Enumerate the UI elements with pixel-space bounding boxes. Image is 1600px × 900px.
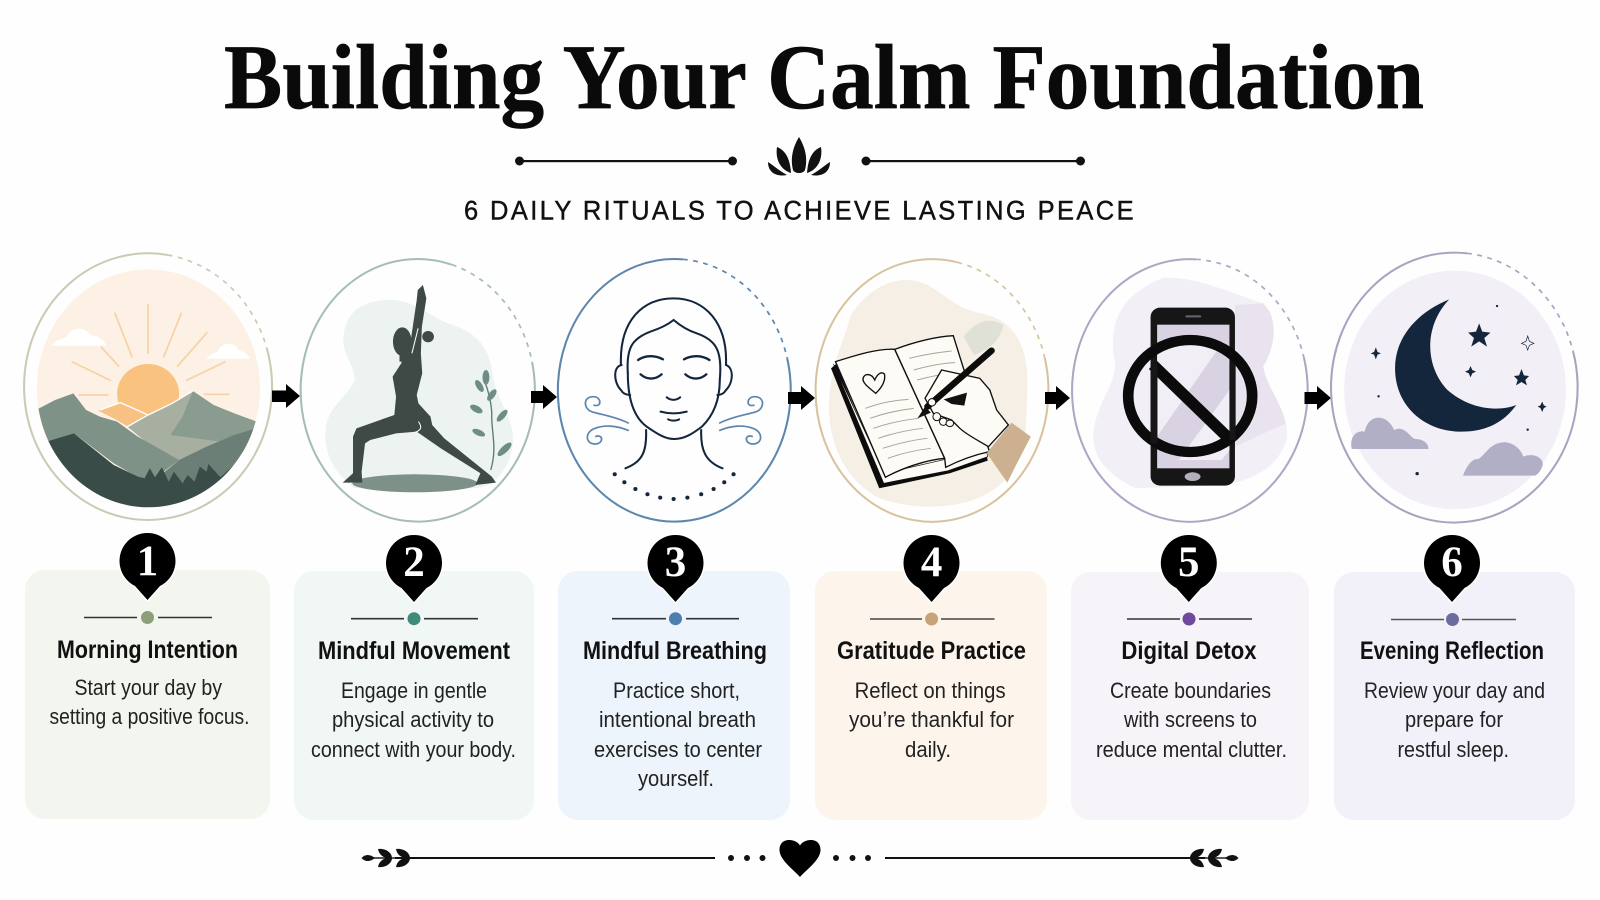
footer ornament: arrows, dots and heart: [362, 840, 1238, 877]
illustration 1: sunrise over mountains: [24, 253, 272, 520]
title: Building Your Calm Foundation: [224, 26, 1424, 128]
illustration 6: moon and stars: [1331, 253, 1578, 523]
heading: Digital Detox: [1121, 637, 1257, 665]
description: Engage in gentle: [341, 678, 487, 703]
description: with screens to: [1123, 707, 1257, 732]
description: Practice short,: [613, 678, 740, 703]
description: Create boundaries: [1110, 678, 1271, 703]
heading: Mindful Movement: [318, 637, 511, 665]
subtitle: 6 DAILY RITUALS TO ACHIEVE LASTING PEACE: [464, 196, 1136, 226]
description: intentional breath: [599, 707, 756, 732]
number pin 3: 3: [665, 539, 686, 586]
heading: Morning Intention: [57, 636, 238, 664]
heading: Gratitude Practice: [837, 637, 1026, 665]
number pin 4: [904, 535, 960, 602]
number pin 5: 5: [1178, 539, 1200, 586]
panel: step 4 card: [815, 535, 1047, 820]
number pin 6: 6: [1441, 539, 1463, 586]
panel: step 2 card: [294, 535, 534, 820]
panel: step 1 card: [25, 533, 270, 819]
illustration 2: yoga pose: [301, 259, 535, 522]
description: restful sleep.: [1398, 737, 1509, 762]
arrow 3: [788, 386, 815, 410]
number pin 1: 1: [137, 538, 158, 585]
arrow 5: [1304, 386, 1331, 410]
description: connect with your body.: [311, 737, 516, 762]
description: [849, 678, 1014, 762]
arrow 4: [1045, 386, 1070, 410]
number pin 5: [1161, 535, 1217, 602]
description: [311, 678, 516, 762]
description: [1364, 678, 1545, 762]
description: you’re thankful for: [849, 707, 1014, 732]
description: Review your day and: [1364, 678, 1545, 703]
arrow 1: [272, 384, 300, 408]
arrow 2: [531, 385, 557, 409]
description: daily.: [905, 737, 951, 762]
number pin 1: [120, 533, 176, 600]
ornament: lotus divider: [515, 137, 1085, 175]
illustration 3: breathing face: [558, 259, 791, 522]
description: [1096, 678, 1287, 762]
description: Reflect on things: [855, 678, 1006, 703]
description: exercises to center: [594, 737, 762, 762]
panel: step 6 card: [1334, 535, 1575, 820]
number pin 3: [648, 535, 704, 602]
description: Start your day by: [74, 675, 222, 700]
illustration 5: digital detox phone: [1072, 259, 1308, 522]
heading: Mindful Breathing: [583, 637, 767, 665]
heading: Evening Reflection: [1360, 637, 1544, 665]
description: [594, 678, 762, 791]
description: physical activity to: [332, 707, 494, 732]
description: yourself.: [638, 766, 714, 791]
panel: step 3 card: [558, 535, 790, 820]
number pin 2: 2: [403, 539, 425, 586]
number pin 4: 4: [921, 539, 942, 586]
description: [50, 675, 250, 729]
description: prepare for: [1405, 707, 1503, 732]
number pin 2: [386, 535, 442, 602]
description: reduce mental clutter.: [1096, 737, 1287, 762]
description: setting a positive focus.: [50, 704, 250, 729]
panel: step 5 card: [1071, 535, 1309, 820]
illustration 4: gratitude journal: [816, 259, 1048, 522]
number pin 6: [1424, 535, 1480, 602]
